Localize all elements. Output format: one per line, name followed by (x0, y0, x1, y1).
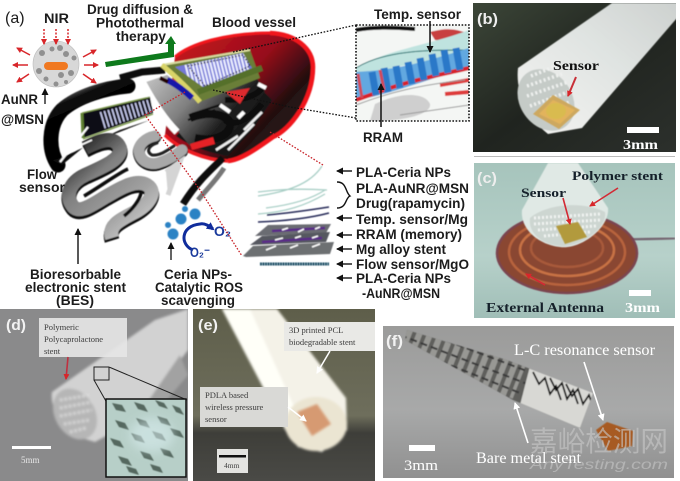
label: L-C resonance sensor: L-C resonance sensor (514, 342, 656, 359)
layer labels list: Drug(rapamycin) (356, 196, 465, 211)
panel letter e: (e) (198, 317, 218, 334)
callout lines: zoom from vessel to inset (145, 25, 356, 256)
panel c: polymer stent with external antenna (474, 163, 675, 318)
label: flow sensor: Flow (27, 167, 57, 182)
inset: zoomed temperature sensor and RRAM (356, 25, 469, 121)
label: bare metal stent: Bare metal stent (476, 450, 582, 467)
layer labels list: PLA-Ceria NPs (356, 271, 451, 286)
scale bar 4mm: 4mm (224, 461, 240, 470)
label: AuNR at MSN: AuNR (1, 92, 38, 107)
divider (474, 156, 675, 157)
sensor chip (533, 95, 580, 129)
panel d: polycaprolactone stent photo (0, 309, 188, 481)
layer labels list: -AuNR@MSN (362, 286, 440, 301)
label: AuNR at MSN (1, 89, 45, 127)
label: bioresorbable electronic stent: Bioresorbable (30, 267, 121, 282)
panel letter b: (b) (477, 11, 498, 28)
labels and arrows: External Antenna (486, 301, 604, 316)
scale bar 3mm: 3mm (623, 138, 658, 153)
main gray serpentine (69, 140, 152, 240)
heading: drug diffusion and photothermal therapy (87, 2, 193, 44)
label: ceria NPs catalytic ROS scavenging (155, 267, 243, 308)
metal stent mesh (405, 332, 593, 428)
panel letter f: (f) (386, 333, 403, 350)
label: RRAM (363, 84, 403, 145)
label: AuNR at MSN: @MSN (1, 112, 44, 127)
heading: drug diffusion and photothermal therapy: Drug diffusion & (87, 2, 193, 17)
label: polymeric polycaprolactone stent: stent (44, 346, 61, 356)
label: PDLA based wireless pressure sensor: sensor (205, 414, 227, 424)
polymer stent tube (522, 163, 608, 247)
arrow: green drug diffusion (105, 36, 176, 67)
label: flow sensor (19, 167, 66, 195)
blood vessel (165, 33, 313, 161)
label: PDLA based wireless pressure sensor (200, 387, 306, 427)
labels and arrows: Sensor (521, 185, 566, 200)
label: polymeric polycaprolactone stent: Polymeric (44, 322, 79, 332)
printed stent tube (44, 309, 188, 447)
label: ceria NPs catalytic ROS scavenging: Ceria NPs- (164, 267, 232, 282)
label: flow sensor: sensor (19, 180, 66, 195)
flow sensor circuit strip (60, 97, 153, 162)
inset: micrograph of stent lattice (106, 399, 186, 477)
temperature sensor and RRAM circuit (160, 50, 262, 102)
layer labels list: Flow sensor/MgO (356, 257, 469, 272)
label: PDLA based wireless pressure sensor: PDLA based (205, 390, 249, 400)
label: bioresorbable electronic stent: (BES) (56, 293, 94, 308)
label: L-C resonance sensor (514, 342, 656, 420)
panel letter a: (a) (5, 10, 25, 27)
watermark: 嘉峪检测网 (530, 426, 668, 457)
layer labels list: Temp. sensor/Mg (356, 212, 468, 227)
scale bar 3mm: 3mm (625, 301, 660, 316)
wireless pressure sensor chip (297, 404, 331, 436)
scale bar 3mm (626, 290, 660, 312)
scale bar 5mm: 5mm (21, 455, 40, 465)
sensor label (553, 59, 599, 96)
scale bar 4mm (217, 449, 248, 473)
layer labels list: RRAM (memory) (356, 227, 462, 242)
label: bioresorbable electronic stent: electronic stent (25, 280, 127, 295)
illustration: stent inside blood vessel (51, 33, 313, 240)
callout square and zoom lines (94, 367, 187, 403)
label: bare metal stent (476, 403, 582, 467)
layer labels list: Mg alloy stent (356, 242, 446, 257)
white stent tube (222, 309, 347, 452)
label: bioresorbable electronic stent (25, 229, 127, 308)
label: temp sensor (374, 7, 462, 52)
small gray serpentine (139, 136, 182, 165)
panel f: bare metal stent with L-C sensor photo (383, 325, 674, 478)
scale bar 5mm (12, 446, 51, 463)
antenna coil (497, 213, 637, 293)
layer labels list: PLA-Ceria NPs (356, 165, 451, 180)
icon: ceria nanoparticles scavenging ROS: O₂⁻ (190, 245, 210, 260)
label: polymeric polycaprolactone stent: Polycaprolactone (44, 334, 103, 344)
label: ceria NPs catalytic ROS scavenging: scavenging (161, 293, 235, 308)
stent cylinder (120, 70, 266, 150)
exploded layer stack (243, 166, 334, 264)
sensor chip (556, 222, 587, 244)
label: PDLA based wireless pressure sensor: wireless pressure (205, 402, 264, 412)
sensor label: Sensor (553, 59, 599, 74)
label: 3D printed PCL biodegradable stent: 3D printed PCL (289, 325, 343, 335)
icon: ceria nanoparticles scavenging ROS (165, 206, 231, 260)
scale bar 3mm (404, 445, 438, 470)
black strut fill under flow strip (52, 120, 150, 165)
layer labels list (337, 165, 469, 301)
panel letter c: (c) (477, 170, 497, 187)
lower black and light struts (166, 158, 224, 204)
heading: blood vessel: Blood vessel (212, 15, 296, 30)
panel e: 3D printed PCL stent photo (193, 309, 375, 481)
label: 3D printed PCL biodegradable stent: biodegradable stent (289, 337, 356, 347)
panel a: bioresorbable electronic stent schematic (1, 2, 469, 308)
stent tube (516, 3, 676, 135)
label: RRAM: RRAM (363, 130, 403, 145)
heading: drug diffusion and photothermal therapy: Photothermal (96, 16, 184, 30)
watermark: AnyTesting.com (529, 456, 668, 472)
panel letter d: (d) (6, 317, 26, 334)
panel b: photo of polymer stent with sensor (473, 3, 677, 153)
label: 3D printed PCL biodegradable stent (284, 322, 375, 373)
scale bar 3mm (624, 127, 659, 149)
label: polymeric polycaprolactone stent (39, 318, 127, 379)
label: ceria NPs catalytic ROS scavenging: Catalytic ROS (155, 280, 243, 295)
scale bar 3mm: 3mm (404, 458, 438, 474)
icon: AuNR at MSN nanoparticle with NIR arrows (13, 11, 98, 87)
L-C resonance sensor (596, 422, 633, 451)
heading: drug diffusion and photothermal therapy: therapy (116, 29, 166, 44)
icon: AuNR at MSN nanoparticle with NIR arrows: NIR (44, 11, 69, 26)
labels and arrows (486, 168, 664, 316)
dark left arc strut (51, 86, 128, 165)
watermark (529, 426, 668, 472)
label: temp sensor: Temp. sensor (374, 7, 462, 22)
icon: ceria nanoparticles scavenging ROS: O₂ (214, 224, 231, 239)
labels and arrows: Polymer stent (572, 168, 664, 183)
layer labels list: PLA-AuNR@MSN (356, 181, 469, 196)
